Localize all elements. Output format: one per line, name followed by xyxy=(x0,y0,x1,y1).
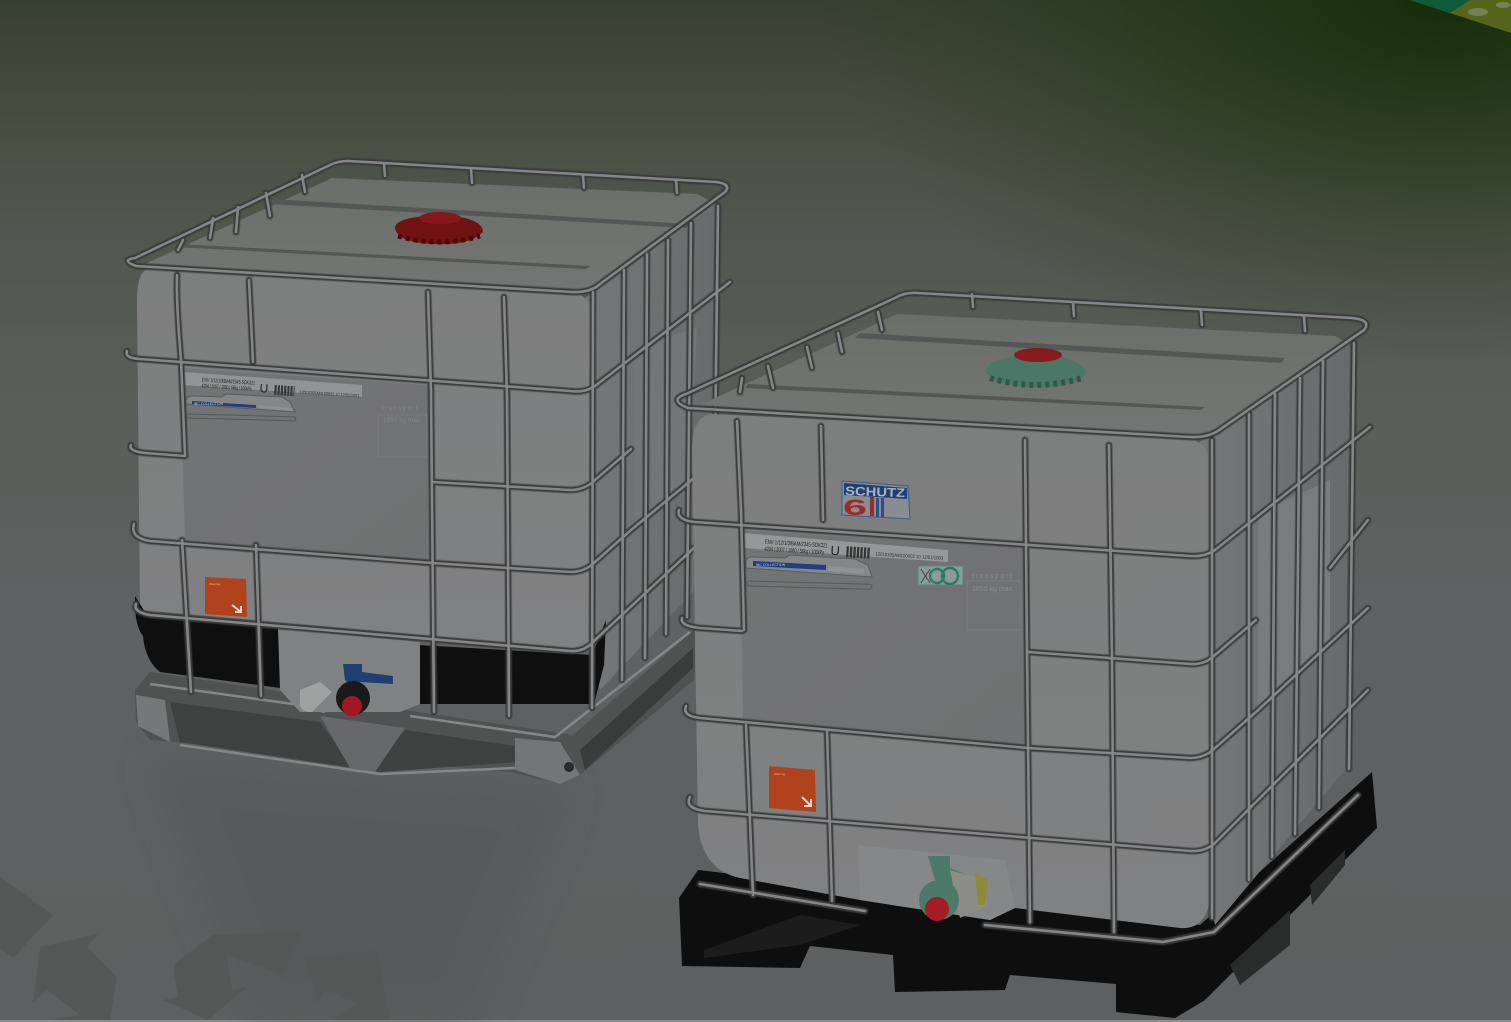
plate text strip: 4204 / 2007 / 1060 / 56kg / 100kPa xyxy=(764,547,825,556)
plate text strip xyxy=(183,372,362,401)
Schutz logo sticker: 6 xyxy=(843,495,867,520)
transport mark: 1850 kg max xyxy=(972,586,1013,593)
tank top surface xyxy=(145,178,718,294)
transport mark: 1850 kg max xyxy=(383,417,421,424)
front label plate xyxy=(180,368,431,561)
black lower band, right xyxy=(419,620,606,704)
steel cage xyxy=(127,161,730,716)
transport mark xyxy=(378,406,427,457)
floor shadow xyxy=(150,760,570,1022)
outlet valve xyxy=(919,856,988,921)
side label plate xyxy=(1258,480,1330,708)
plate tab xyxy=(186,394,296,421)
outlet recess xyxy=(278,628,420,712)
warning sticker xyxy=(205,577,247,617)
plate tab: IBC COLLECTION xyxy=(194,402,224,406)
steel pallet xyxy=(135,628,696,784)
plate text strip: 12010305AM100002 10 12/01/1003 xyxy=(299,390,360,398)
transport mark xyxy=(967,573,1021,630)
plate text strip: U xyxy=(830,543,840,558)
plate text strip: 4204 / 2007 / 1060 / 56kg / 100kPa xyxy=(201,383,252,393)
plate text strip: ENV 1/12/1/3/BAM/2345-SDK321 xyxy=(765,540,828,550)
side label plate xyxy=(633,327,697,521)
transport mark: transport xyxy=(382,406,419,412)
warning sticker: Warning xyxy=(774,772,785,776)
steel cage xyxy=(677,293,1370,942)
outlet recess xyxy=(858,845,1015,920)
green corner of background xyxy=(1410,0,1511,33)
tank 1: left IBC on steel pallet xyxy=(127,161,730,784)
tank right side xyxy=(1195,343,1350,925)
top ridges xyxy=(175,199,690,269)
filler cap, green with red centre xyxy=(986,348,1086,387)
warning sticker xyxy=(769,766,816,812)
transport mark: transport xyxy=(972,573,1013,580)
plate tab: IBC COLLECTION xyxy=(756,563,786,567)
plate text strip: ENV 1/12/1/3/BAM/2345-SDK321 xyxy=(202,377,255,387)
plate tab xyxy=(746,555,872,589)
tank front face xyxy=(692,414,1212,928)
recycling arrows watermark xyxy=(0,877,390,1020)
top ridges xyxy=(745,333,1285,410)
front label plate xyxy=(740,530,1026,750)
tank 2: right IBC on plastic pallet xyxy=(677,293,1377,1018)
warning sticker: Warning xyxy=(209,582,220,586)
plate text strip xyxy=(743,533,948,565)
tank right side xyxy=(585,205,716,690)
outlet valve xyxy=(300,664,393,716)
tank front face xyxy=(137,268,592,650)
green food-safe logo xyxy=(918,566,963,585)
black plastic pallet xyxy=(679,772,1377,1018)
Schutz logo sticker xyxy=(842,481,910,520)
Schutz logo sticker: SCHUTZ xyxy=(845,484,906,500)
plate text strip: U xyxy=(259,381,269,396)
filler cap, red xyxy=(395,212,483,244)
black lower band, left xyxy=(135,596,280,688)
plate text strip: 12010305AM100002 10 12/01/1003 xyxy=(875,552,944,562)
tank top surface xyxy=(700,314,1350,440)
